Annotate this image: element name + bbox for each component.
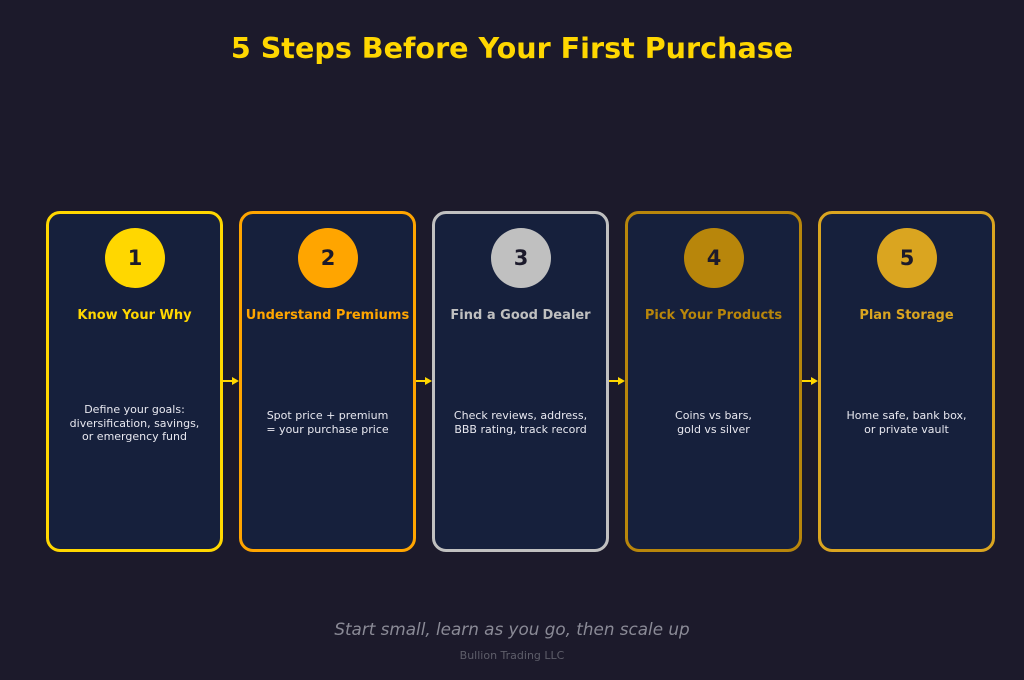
card 4: [625, 211, 802, 552]
card 5: [818, 211, 995, 552]
circle 5: [877, 228, 937, 288]
circle 3: [491, 228, 551, 288]
arrow 3: [609, 377, 625, 385]
heading 1: Know Your Why: [77, 308, 192, 323]
circle 2: [298, 228, 358, 288]
arrow 2: [416, 377, 432, 385]
heading 5: Plan Storage: [859, 308, 954, 323]
text 2: [266, 409, 389, 436]
text 3: [454, 409, 587, 436]
text 1: diversification, savings,: [70, 416, 199, 430]
text 5: or private vault: [864, 422, 949, 436]
text 5: Home safe, bank box,: [846, 409, 967, 422]
circle 4: [684, 228, 744, 288]
footer: Bullion Trading LLC: [460, 649, 564, 662]
circle 5: 5: [900, 246, 914, 270]
card 1: [46, 211, 223, 552]
circle 4: 4: [707, 246, 721, 270]
text 5: [846, 409, 967, 436]
card 3: [432, 211, 609, 552]
arrow 4: [802, 377, 818, 385]
text 4: gold vs silver: [677, 422, 750, 436]
heading 3: Find a Good Dealer: [450, 308, 591, 323]
text 4: Coins vs bars,: [675, 409, 752, 422]
text 2: = your purchase price: [266, 422, 389, 436]
text 1: or emergency fund: [82, 430, 187, 443]
heading 2: Understand Premiums: [246, 308, 409, 323]
text 3: BBB rating, track record: [454, 422, 587, 436]
card 2: [239, 211, 416, 552]
arrow 1: [223, 377, 239, 385]
circle 1: [105, 228, 165, 288]
text 1: [70, 403, 199, 443]
text 1: Define your goals:: [84, 403, 185, 416]
text 4: [675, 409, 752, 436]
tagline: Start small, learn as you go, then scale up: [334, 619, 690, 639]
circle 3: 3: [514, 246, 528, 270]
text 3: Check reviews, address,: [454, 409, 587, 422]
heading 4: Pick Your Products: [645, 308, 782, 323]
text 2: Spot price + premium: [267, 409, 388, 422]
circle 1: 1: [128, 246, 142, 270]
circle 2: 2: [321, 246, 335, 270]
title: 5 Steps Before Your First Purchase: [231, 31, 793, 65]
